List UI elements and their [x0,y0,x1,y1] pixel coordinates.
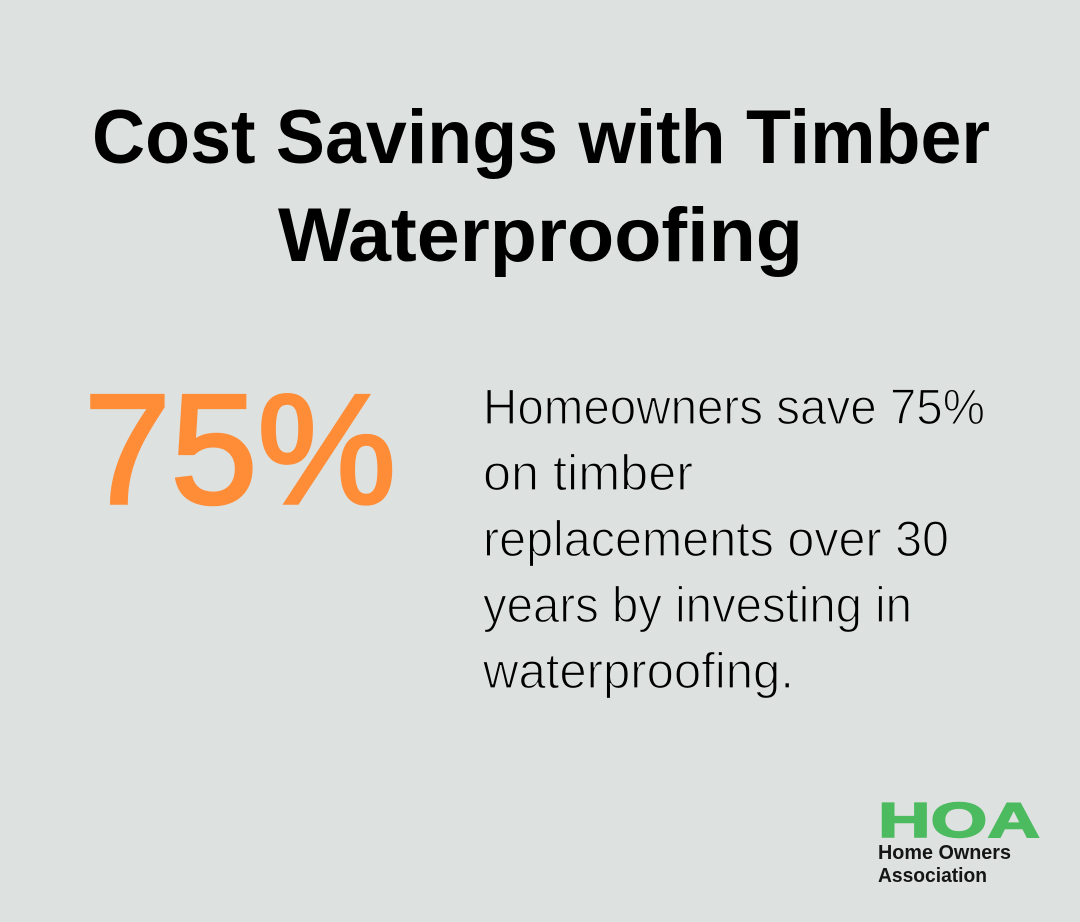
logo text: Home Owners Association [878,842,1011,887]
logo: HOA Home Owners Association [878,794,1040,887]
big statistic: 75%: 75% [84,363,396,537]
title [92,95,990,278]
title: Waterproofing [278,193,803,278]
logo mark: HOA: HOA [878,794,1040,848]
logo text: Home Owners Association: Home Owners [878,842,1011,864]
description text: Homeowners save 75% [483,379,985,435]
description text: on timber [483,445,693,501]
title: Cost Savings with Timber [92,95,990,180]
logo text: Home Owners Association: Association [878,865,987,887]
description text: waterproofing. [482,643,794,699]
description text: years by investing in [483,577,912,633]
description text [482,379,985,699]
description text: replacements over 30 [483,511,949,567]
